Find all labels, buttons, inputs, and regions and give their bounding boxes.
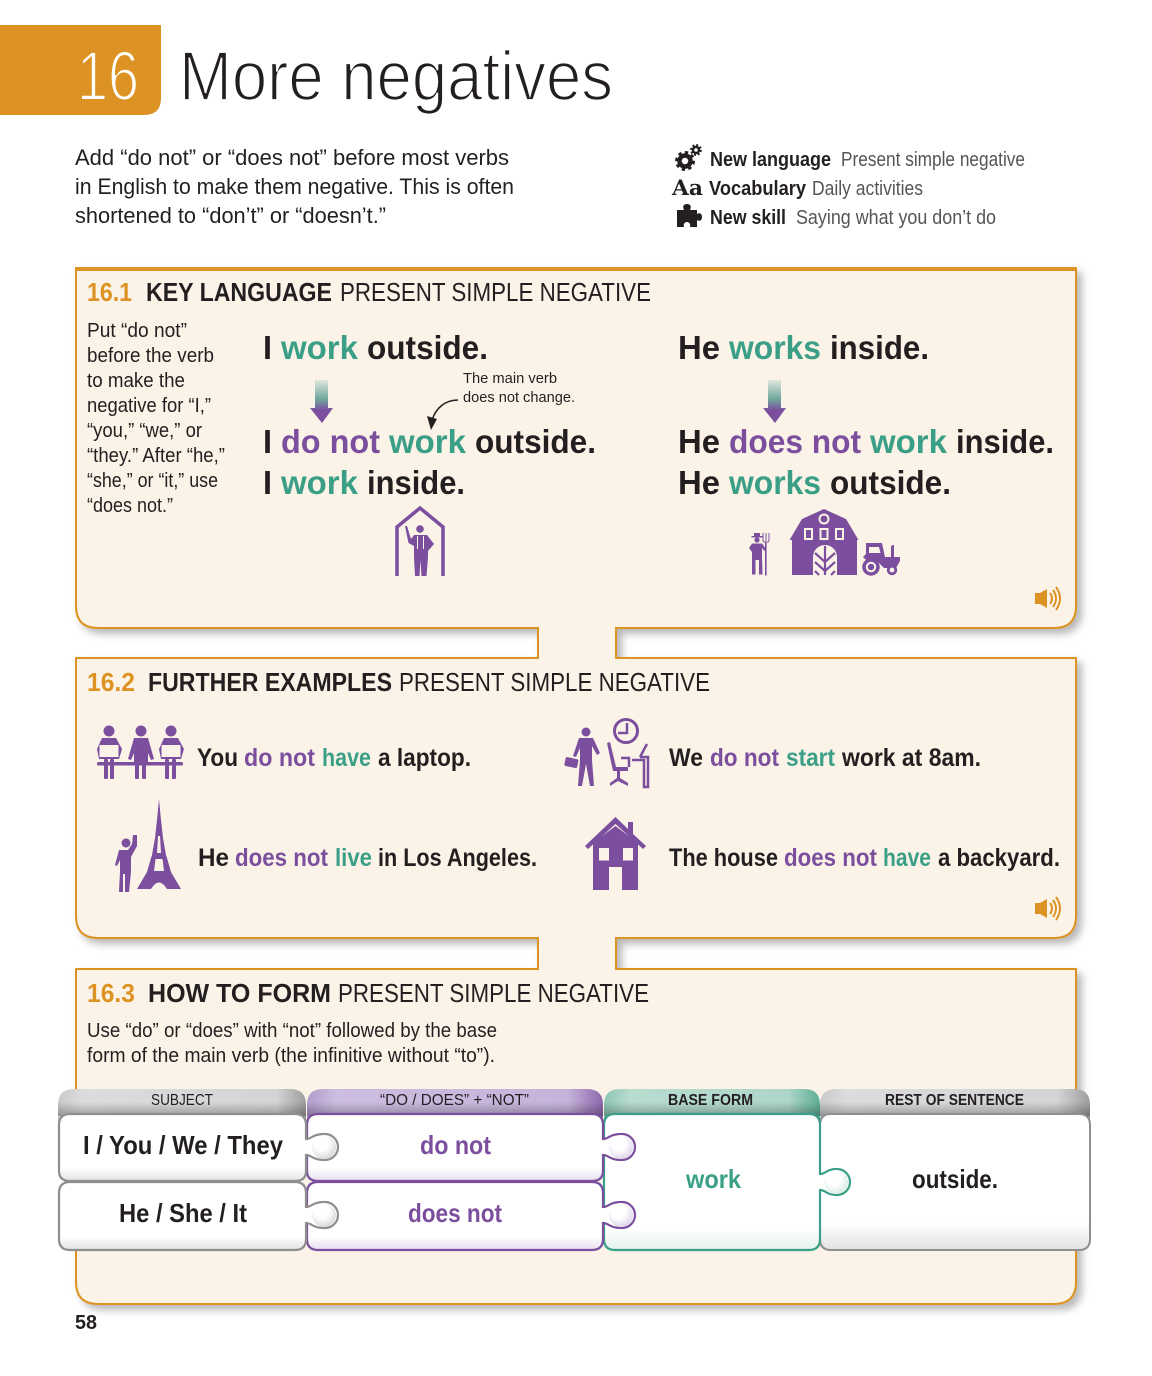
column header: rest of sentence xyxy=(820,1089,1090,1125)
sentence: The house does not have a backyard xyxy=(669,844,1060,872)
icon: businessman, clock and desk xyxy=(564,720,648,787)
explanation text: negative for “I,” xyxy=(87,395,211,417)
heading 16.3: HOW TO FORM xyxy=(148,978,331,1008)
new skill value: Saying what you don’t do xyxy=(796,207,996,229)
sentence: I work inside: I xyxy=(263,464,272,501)
cell: He / She / It: He / She / It xyxy=(119,1198,247,1228)
cell: does not xyxy=(307,1182,635,1250)
explanation text: form of the main verb (the infinitive without “to”). xyxy=(87,1045,495,1067)
explanation text: to make the xyxy=(87,370,185,392)
callout: main verb does not change: does not change. xyxy=(463,389,575,406)
sentence: I work outside: work xyxy=(280,329,359,366)
column header: base form: BASE FORM xyxy=(668,1092,753,1109)
callout: main verb does not change: The main verb xyxy=(463,370,557,387)
sentence: He does not live in Los Angeles: He xyxy=(198,844,229,872)
heading 16.1: PRESENT SIMPLE NEGATIVE xyxy=(340,277,651,307)
sentence: We do not start work at 8am: start xyxy=(786,744,836,772)
connected panel background xyxy=(76,268,1076,1304)
sentence: He does not live in Los Angeles: in Los Angeles. xyxy=(378,844,537,872)
icon: farmer xyxy=(749,533,769,576)
sentence: The house does not have a backyard: a backyard. xyxy=(938,844,1060,872)
explanation text: “you,” “we,” or xyxy=(87,420,202,442)
sentence: You do not have a laptop xyxy=(197,744,471,772)
callout: main verb does not change xyxy=(427,370,575,430)
heading 16.1 xyxy=(87,277,651,307)
icon: Aa: Aa xyxy=(671,175,703,200)
explanation text: “she,” or “it,” use xyxy=(87,470,218,492)
intro text: shortened to “don’t” or “doesn’t.” xyxy=(75,203,386,228)
sentence: He does not work inside: does not xyxy=(729,423,861,460)
sentence: He does not work inside: work xyxy=(869,423,948,460)
cell: do not xyxy=(307,1114,635,1181)
sentence: You do not have a laptop: You xyxy=(197,744,238,772)
explanation text: “does not.” xyxy=(87,495,173,517)
intro text: Add “do not” or “does not” before most verbs xyxy=(75,145,509,170)
sentence: I do not work outside: do not xyxy=(281,423,380,460)
column header: do / does + not: “DO / DOES” + “NOT” xyxy=(380,1092,529,1109)
explanation text xyxy=(87,320,225,517)
vocabulary value: Daily activities xyxy=(812,178,923,200)
learning points list xyxy=(671,145,1025,229)
page number: 58 xyxy=(75,1312,97,1334)
explanation text: Put “do not” xyxy=(87,320,187,342)
sentence: He does not live in Los Angeles xyxy=(198,844,537,872)
sentence: He works outside: works xyxy=(728,464,821,501)
chapter number tab: 16 xyxy=(77,37,139,115)
heading 16.2 xyxy=(87,667,710,697)
vocabulary label: Vocabulary xyxy=(709,178,807,200)
sentence: We do not start work at 8am: We xyxy=(669,744,703,772)
cell: outside: outside. xyxy=(912,1164,998,1194)
sentence: He does not live in Los Angeles: live xyxy=(335,844,372,872)
sentence: The house does not have a backyard: does not xyxy=(784,844,878,872)
sentence: You do not have a laptop: have xyxy=(322,744,371,772)
intro text: in English to make them negative. This is often xyxy=(75,174,514,199)
column header: subject xyxy=(58,1089,306,1125)
sentence: He does not work inside: inside. xyxy=(956,423,1054,460)
sentence: I do not work outside: work xyxy=(388,423,467,460)
sentence: I work outside: I xyxy=(263,329,272,366)
sentence: He works inside: works xyxy=(728,329,821,366)
heading 16.3: 16.3 xyxy=(87,978,135,1008)
icon: people with laptops xyxy=(97,726,184,779)
sentence: He works inside: He xyxy=(678,329,720,366)
cell: work: work xyxy=(685,1164,741,1194)
heading 16.3: PRESENT SIMPLE NEGATIVE xyxy=(338,978,649,1008)
sentence: I work outside: outside. xyxy=(367,329,488,366)
sentence: We do not start work at 8am xyxy=(669,744,981,772)
sentence: He does not work inside: He xyxy=(678,423,720,460)
icon: house xyxy=(585,817,646,890)
sentence: He works outside xyxy=(678,464,951,501)
panel: 16.1 key language xyxy=(87,277,1060,610)
formula table xyxy=(58,1089,1090,1250)
cell: I / You / We / They xyxy=(59,1114,338,1181)
cell: He / She / It xyxy=(59,1182,338,1250)
explanation text xyxy=(87,1020,497,1067)
arrow: left down xyxy=(310,380,333,423)
panel: 16.2 further examples xyxy=(87,667,1060,920)
icon: barn xyxy=(790,509,858,575)
sentence: He works outside: He xyxy=(678,464,720,501)
cell: do not: do not xyxy=(420,1130,491,1160)
column header: base form xyxy=(604,1089,820,1125)
sentence: He does not live in Los Angeles: does not xyxy=(235,844,329,872)
sentence: I do not work outside: I xyxy=(263,423,272,460)
column header: rest of sentence: REST OF SENTENCE xyxy=(885,1092,1024,1109)
cell: outside xyxy=(820,1114,1090,1250)
sentence: He works inside xyxy=(678,329,929,366)
sentence: He does not work inside xyxy=(678,423,1054,460)
cell: work xyxy=(604,1114,850,1250)
heading 16.3 xyxy=(87,978,649,1008)
explanation text: Use “do” or “does” with “not” followed by the base xyxy=(87,1020,497,1042)
icon: tractor xyxy=(863,543,900,574)
icon: man and Eiffel Tower xyxy=(115,799,181,892)
sentence: We do not start work at 8am: do not xyxy=(710,744,780,772)
heading 16.1: KEY LANGUAGE xyxy=(146,277,332,307)
sentence: I work outside xyxy=(263,329,488,366)
explanation text: before the verb xyxy=(87,345,214,367)
intro text xyxy=(75,145,514,228)
sentence: I do not work outside xyxy=(263,423,596,460)
heading 16.2: 16.2 xyxy=(87,667,135,697)
sentence: We do not start work at 8am: work at 8am. xyxy=(841,744,981,772)
sentence: I work inside: inside. xyxy=(367,464,465,501)
column header: do / does + not xyxy=(307,1089,603,1125)
icon: puzzle piece xyxy=(677,204,702,227)
new skill label: New skill xyxy=(710,207,786,229)
icon: audio speaker xyxy=(1035,587,1060,610)
sentence: You do not have a laptop: do not xyxy=(244,744,316,772)
new language label: New language xyxy=(710,149,831,171)
arrow: right down xyxy=(763,380,786,423)
title: More negatives xyxy=(179,37,613,115)
heading 16.2: PRESENT SIMPLE NEGATIVE xyxy=(399,667,710,697)
sentence: The house does not have a backyard: The house xyxy=(669,844,778,872)
icon: gears xyxy=(676,145,701,170)
column header: subject: SUBJECT xyxy=(151,1092,213,1109)
new language value: Present simple negative xyxy=(841,149,1025,171)
sentence: He works outside: outside. xyxy=(830,464,951,501)
sentence: He works inside: inside. xyxy=(830,329,929,366)
cell: I / You / We / They: I / You / We / They xyxy=(83,1130,283,1160)
panel: 16.3 how to form xyxy=(58,978,1090,1250)
heading 16.2: FURTHER EXAMPLES xyxy=(148,667,392,697)
sentence: I work inside xyxy=(263,464,465,501)
sentence: You do not have a laptop: a laptop. xyxy=(378,744,471,772)
icon: man inside building xyxy=(397,508,443,576)
sentence: I work inside: work xyxy=(280,464,359,501)
icon: audio speaker xyxy=(1035,897,1060,920)
heading 16.1: 16.1 xyxy=(87,277,132,307)
sentence: I do not work outside: outside. xyxy=(475,423,596,460)
chapter number tab xyxy=(0,25,161,115)
sentence: The house does not have a backyard: have xyxy=(883,844,931,872)
explanation text: “they.” After “he,” xyxy=(87,445,225,467)
cell: does not: does not xyxy=(408,1198,502,1228)
